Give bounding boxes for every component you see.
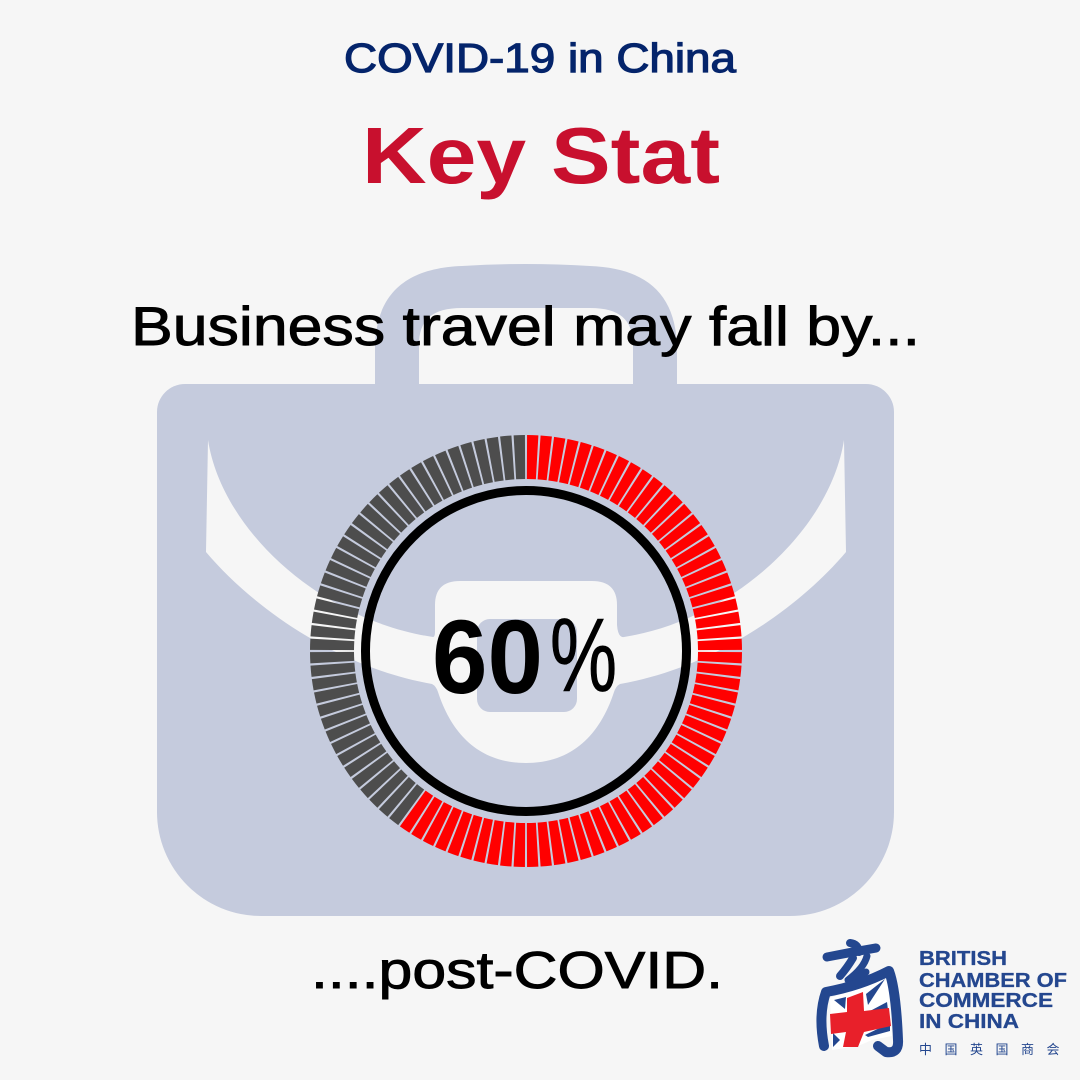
- logo wordmark: BRITISH: [919, 947, 1007, 970]
- subheading: Business travel may fall by: Business travel may fall by...: [131, 295, 920, 357]
- briefcase body: [157, 384, 894, 916]
- logo Chinese name: 中国英国商会: [919, 1039, 1072, 1058]
- logo wordmark: IN CHINA: [919, 1010, 1019, 1033]
- footer text: post-COVID: ....post-COVID.: [311, 942, 723, 1000]
- logo: British Chamber of Commerce in China: [821, 943, 1072, 1058]
- big number: 60%: %: [550, 598, 617, 714]
- logo icon: union flag brush mark: [821, 943, 898, 1052]
- briefcase handle: [375, 264, 677, 390]
- logo wordmark: COMMERCE: [919, 989, 1053, 1012]
- briefcase flap band and clasp: [206, 440, 846, 763]
- logo wordmark: CHAMBER OF: [919, 969, 1067, 992]
- gauge grey segments: 40 of 100: [310, 435, 526, 826]
- big number: 60%: 60: [432, 599, 543, 716]
- heading: Key Stat: Key Stat: [362, 111, 720, 200]
- gauge red segments: 60 of 100: [332, 457, 720, 845]
- clasp centre: [477, 619, 577, 712]
- big number: 60%: [432, 598, 617, 716]
- title: COVID-19 in China: COVID-19 in China: [344, 35, 736, 81]
- logo wordmark: [919, 947, 1067, 1033]
- briefcase illustration: [157, 264, 894, 916]
- gauge inner ring: [366, 490, 686, 812]
- radial gauge: 60 percent: [332, 457, 720, 845]
